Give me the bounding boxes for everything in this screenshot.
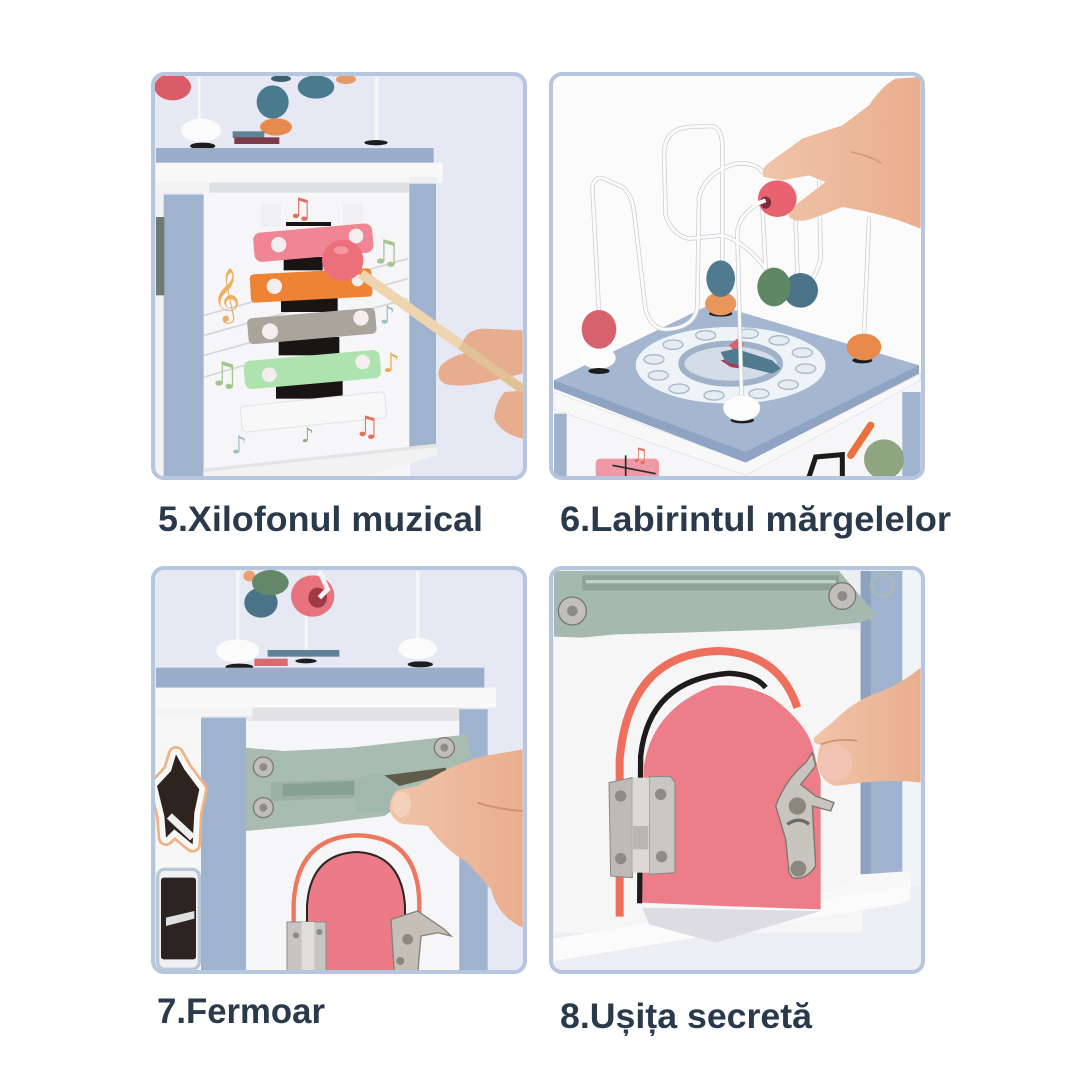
pink bead held — [752, 180, 797, 217]
icons: music notes: ♪ — [383, 348, 400, 379]
icons: music notes: 𝄞 — [213, 267, 240, 324]
icons: music notes: ♫ — [371, 233, 401, 272]
box lid — [156, 148, 443, 194]
door latch — [391, 911, 451, 974]
xylophone bars — [240, 204, 387, 432]
door latch — [776, 753, 834, 878]
zipper — [246, 734, 471, 831]
icons: music notes — [209, 192, 401, 460]
icons: music notes: ♫ — [209, 354, 239, 393]
panel frame 2 — [551, 74, 923, 478]
box front decals: ♫ — [631, 443, 649, 467]
pink door — [642, 685, 821, 909]
base rail — [554, 871, 911, 961]
mallet — [322, 240, 523, 389]
panel frame 4 — [551, 568, 923, 972]
icons: music notes: ♫ — [288, 192, 313, 225]
hand holding mallet — [438, 329, 527, 439]
box body and columns — [156, 709, 488, 974]
caption: xylophone: 5.Xilofonul muzical — [158, 500, 483, 539]
icon: square shape sorter — [158, 869, 199, 969]
panel: musical xylophone photo — [151, 72, 527, 480]
caption: secret door: 8.Ușița secretă — [560, 997, 813, 1036]
side column — [861, 571, 902, 874]
abacus beads on top — [216, 570, 437, 670]
icons: music notes: ♪ — [301, 423, 314, 447]
caption: zipper: 7.Fermoar — [157, 992, 325, 1031]
box body — [554, 374, 921, 480]
panel frame 3 — [153, 568, 525, 972]
telephone dial — [636, 327, 826, 404]
icon: star shape sorter — [157, 754, 199, 844]
panel: bead maze photo — [549, 72, 925, 480]
icons: music notes: ♪ — [379, 301, 395, 330]
door hinge — [609, 777, 675, 878]
box lid — [156, 668, 496, 723]
door hinge — [287, 922, 326, 974]
panel: secret door photo — [549, 566, 925, 974]
icons: music notes: ♪ — [231, 431, 247, 460]
beads — [581, 260, 881, 423]
bead maze wires — [592, 126, 869, 400]
zipper — [554, 571, 893, 638]
box lid — [554, 304, 919, 463]
door arch and opening — [620, 651, 797, 917]
hand on zipper — [390, 749, 523, 928]
staff lines — [204, 259, 408, 377]
abacus beads on top — [154, 74, 388, 149]
box body and columns — [156, 184, 438, 480]
hand on latch — [814, 668, 921, 786]
panel: zipper photo — [151, 566, 527, 974]
hand on bead — [763, 77, 921, 229]
icons: music notes: ♫ — [354, 410, 380, 443]
box front decals — [596, 425, 904, 480]
wall — [554, 629, 862, 933]
door arch — [294, 835, 419, 974]
panel frame 1 — [153, 74, 525, 478]
xylophone slots — [276, 222, 343, 399]
caption: bead maze: 6.Labirintul mărgelelor — [560, 500, 951, 539]
